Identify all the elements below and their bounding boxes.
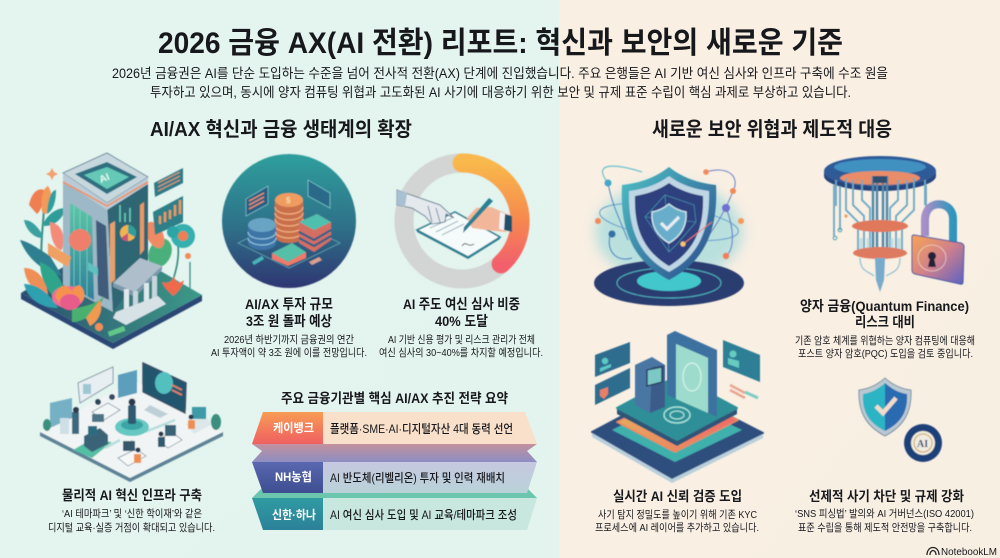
background: left panel	[0, 0, 559, 558]
text: quantum finance: 포스트 양자 암호(PQC) 도입을 검토 중입니다.	[798, 347, 973, 360]
icon: isometric AI tower and bank	[20, 153, 202, 349]
icon: coins and data blocks in a circle: $	[286, 196, 291, 205]
text: loan review share: 40% 도달	[435, 313, 488, 329]
plants behind	[41, 205, 44, 280]
row: Shinhan Hana: 신한·하나	[272, 507, 316, 522]
text: physical AI infrastructure	[48, 488, 215, 534]
row band: purple connector	[252, 444, 537, 462]
pen	[463, 198, 493, 233]
text: fraud prevention: ‘SNS 피싱법’ 발의와 AI 거버넌스(ISO 42001)	[795, 508, 974, 520]
icon: cyber shield with orbits	[594, 166, 744, 306]
background: right panel	[559, 0, 1000, 558]
text: loan review share	[379, 296, 543, 359]
text: quantum finance: 양자 금융(Quantum Finance)	[800, 298, 969, 314]
floating panels	[154, 168, 183, 197]
text: real-time verification: 사기 탐지 정밀도를 높이기 위해 기존 KYC	[598, 508, 757, 521]
text: real-time verification	[595, 489, 759, 534]
row band: green connector	[252, 488, 537, 498]
document	[417, 212, 500, 257]
icon: identity verification platform	[592, 331, 763, 483]
text: loan review share: AI 기반 신용 평가 및 리스크 관리가 전체	[388, 334, 535, 346]
text: fraud prevention: 선제적 사기 차단 및 규제 강화	[809, 489, 965, 504]
text: investment scale: AI 투자액이 약 3조 원에 이를 전망입니다.	[211, 346, 367, 359]
row: NH: AI 반도체(리벨리온) 투자 및 인력 재배치	[330, 470, 505, 485]
icon: check shield and AI seal: AI	[917, 439, 928, 450]
footer: NotebookLM mark: NotebookLM	[941, 546, 997, 558]
bank	[113, 258, 162, 292]
icon: quantum computer and padlock	[824, 156, 964, 292]
text: investment scale	[211, 296, 367, 359]
right flowers	[170, 245, 178, 292]
text: physical AI infrastructure: 디지털 교육·실증 거점이 확대되고 있습니다.	[48, 521, 215, 534]
text: loan review share: AI 주도 여신 심사 비중	[403, 296, 520, 312]
human hand	[467, 207, 512, 232]
chart: 40% donut with robot and human hands	[397, 163, 520, 279]
text: fraud prevention: 표준 수립을 통해 제도적 안전망을 구축합니다.	[798, 521, 972, 534]
table: strategy summary	[252, 391, 537, 530]
text: real-time verification: 실시간 AI 신뢰 검증 도입	[613, 489, 742, 504]
intro paragraph: 투자하고 있으며, 동시에 양자 컴퓨팅 위협과 고도화된 AI 사기에 대응하기 위한 보안 및 규제 표준 수립이 핵심 과제로 부상하고 있습니다.	[150, 85, 851, 100]
id panels	[595, 342, 630, 377]
text: investment scale: 3조 원 돌파 예상	[246, 313, 332, 329]
title: 2026 금융 AX(AI 전환) 리포트: 혁신과 보안의 새로운 기준	[158, 27, 843, 60]
text: investment scale: AI/AX 투자 규모	[245, 296, 333, 312]
text: real-time verification: 프로세스에 AI 레이어를 추가하고 있습니다.	[595, 521, 759, 534]
kiosk	[635, 357, 665, 413]
row: Shinhan Hana: AI 여신 심사 도입 및 AI 교육/테마파크 조성	[330, 508, 517, 522]
row: NH	[252, 462, 537, 493]
text: loan review share: 여신 심사의 30~40%를 차지할 예정입니다.	[379, 346, 543, 359]
text: quantum finance: 기존 암호 체계를 위협하는 양자 컴퓨팅에 대응해	[795, 334, 975, 347]
icon: coins and data blocks in a circle	[222, 154, 356, 288]
tower faces	[63, 173, 113, 312]
intro paragraph: 2026년 금융권은 AI를 단순 도입하는 수준을 넘어 전사적 전환(AX) 단계에 진입했습니다. 주요 은행들은 AI 기반 여신 심사와 인프라 구축에 수조 원을	[112, 66, 888, 81]
heading: right section: 새로운 보안 위협과 제도적 대응	[652, 118, 892, 141]
gate	[667, 331, 717, 417]
row: K bank: 케이뱅크	[273, 421, 314, 435]
row: K bank	[252, 412, 537, 444]
icon: check shield and AI seal	[859, 378, 942, 462]
row: NH: NH농협	[275, 469, 312, 484]
row: Shinhan Hana	[252, 498, 537, 530]
row: K bank: 플랫폼·SME·AI·디지털자산 4대 동력 선언	[330, 422, 513, 436]
text: physical AI infrastructure: ‘AI 테마파크’ 및 ‘신한 학이재’와 같은	[62, 508, 202, 520]
text: quantum finance: 리스크 대비	[855, 314, 915, 330]
left front plants	[24, 268, 48, 294]
text: quantum finance	[795, 298, 975, 360]
roof	[63, 153, 148, 203]
text: investment scale: 2026년 하반기까지 금융권의 연간	[224, 333, 354, 346]
heading: left section: AI/AX 혁신과 금융 생태계의 확장	[150, 118, 412, 141]
icon: isometric physical AI office	[40, 363, 223, 482]
text: physical AI infrastructure: 물리적 AI 혁신 인프라 구축	[62, 488, 202, 503]
icon: isometric AI tower and bank: AI	[98, 172, 112, 186]
text: fraud prevention	[795, 489, 974, 534]
table heading: 주요 금융기관별 핵심 AI/AX 추진 전략 요약	[281, 391, 508, 406]
robot hand	[397, 190, 454, 224]
intro paragraph	[112, 66, 888, 100]
